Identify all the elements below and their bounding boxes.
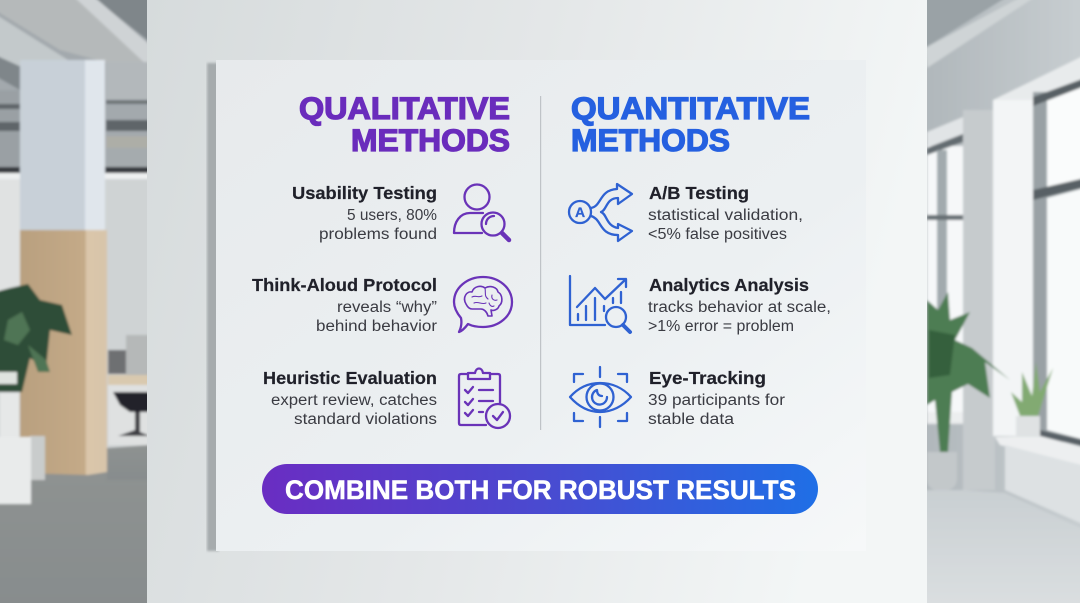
icon: brain speech bubble xyxy=(454,277,512,332)
text: eye-tracking xyxy=(648,368,785,428)
icon: eye tracking xyxy=(570,367,631,427)
text: heuristic evaluation xyxy=(263,368,437,428)
icon: user with magnifier xyxy=(454,184,509,240)
background: office left side xyxy=(0,0,150,603)
text: usability testing: Usability Testing xyxy=(292,183,437,203)
text: analytics analysis: >1% error = problem xyxy=(648,318,794,335)
text: analytics analysis: Analytics Analysis xyxy=(649,275,809,295)
text: heuristic evaluation: standard violations xyxy=(294,411,437,428)
text: heuristic evaluation: expert review, catches xyxy=(271,392,437,409)
divider xyxy=(540,96,541,430)
text: think-aloud protocol xyxy=(252,275,437,335)
icon: analytics chart xyxy=(570,276,630,332)
heading: qualitative xyxy=(299,90,510,158)
text: usability testing: 5 users, 80% xyxy=(347,207,437,224)
text: think-aloud protocol: behind behavior xyxy=(316,318,437,335)
background: office right side xyxy=(925,0,1080,603)
text: a/b testing: statistical validation, xyxy=(648,207,803,224)
text: think-aloud protocol: reveals “why” xyxy=(337,299,437,316)
heading: quantitative: QUANTITATIVE xyxy=(571,90,810,126)
icon: A/B split arrows xyxy=(569,184,632,241)
icon: A/B split arrows: A xyxy=(575,204,585,220)
callout: combine both: COMBINE BOTH FOR ROBUST RESULTS xyxy=(285,475,796,505)
text: a/b testing: A/B Testing xyxy=(649,183,749,203)
icon: clipboard checklist xyxy=(459,368,510,428)
text: heuristic evaluation: Heuristic Evaluation xyxy=(263,368,437,388)
heading: quantitative xyxy=(571,90,810,158)
heading: qualitative: QUALITATIVE xyxy=(299,90,510,126)
wall xyxy=(147,0,927,603)
text: usability testing xyxy=(292,183,437,243)
heading: qualitative: METHODS xyxy=(351,122,510,158)
text: eye-tracking: 39 participants for xyxy=(648,392,785,409)
heading: quantitative: METHODS xyxy=(571,122,730,158)
text: think-aloud protocol: Think-Aloud Protocol xyxy=(252,275,437,295)
text: analytics analysis: tracks behavior at scale, xyxy=(648,299,831,316)
text: a/b testing: <5% false positives xyxy=(648,226,787,243)
text: usability testing: problems found xyxy=(319,226,437,243)
panel: board xyxy=(216,60,866,551)
text: eye-tracking: Eye-Tracking xyxy=(649,368,766,388)
text: eye-tracking: stable data xyxy=(648,411,734,428)
callout: combine both xyxy=(262,464,818,514)
panel shadow xyxy=(207,63,219,551)
text: analytics analysis xyxy=(648,275,831,335)
text: a/b testing xyxy=(648,183,803,243)
